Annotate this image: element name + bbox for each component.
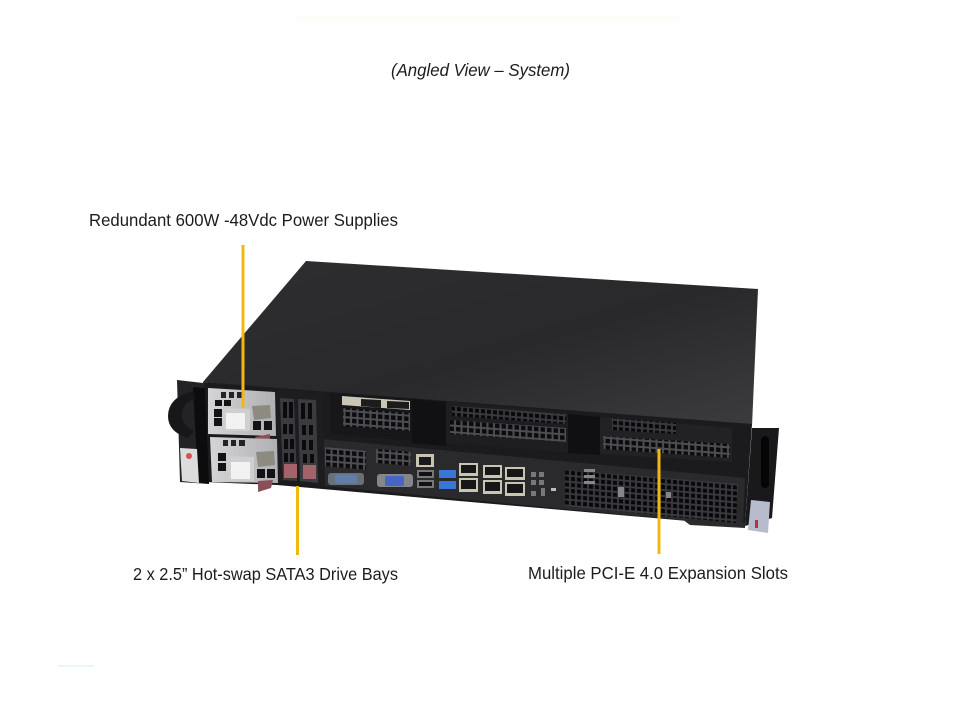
RJ45 management port bbox=[416, 454, 434, 467]
lower chassis lip bbox=[678, 516, 745, 528]
serial port bbox=[328, 473, 364, 485]
leader line: power supplies bbox=[242, 245, 244, 408]
I/O panel bbox=[322, 439, 745, 526]
right pillar bbox=[568, 414, 600, 455]
server lid bbox=[203, 261, 758, 426]
vent highlights bbox=[584, 469, 671, 498]
small connectors bbox=[531, 472, 556, 496]
server illustration bbox=[168, 261, 779, 533]
label: drive bays: 2 x 2.5” Hot-swap SATA3 Drive Bays bbox=[133, 564, 398, 584]
expansion bay: left bbox=[330, 393, 412, 441]
PSU handle tab bbox=[255, 434, 270, 446]
LAN port block bbox=[459, 463, 525, 496]
label: expansion slots: Multiple PCI-E 4.0 Expansion Slots bbox=[528, 563, 788, 583]
faint footer smudge bbox=[58, 665, 94, 667]
expansion bay: middle bbox=[446, 402, 568, 452]
power supply modules bbox=[208, 388, 278, 492]
faint header residue bbox=[295, 15, 680, 22]
left rack ear bbox=[168, 380, 209, 484]
drive bays bbox=[277, 389, 325, 486]
label: power supplies: Redundant 600W -48Vdc Power Supplies bbox=[89, 210, 398, 230]
vent grid: serial port side bbox=[325, 447, 366, 470]
PSU handle tab bbox=[258, 480, 273, 492]
USB 3 ports bbox=[439, 470, 456, 489]
leader line: drive bays bbox=[296, 486, 299, 555]
caption: angled view: (Angled View – System) bbox=[391, 60, 570, 80]
VGA port bbox=[377, 474, 413, 487]
expansion bay: right bbox=[600, 417, 732, 462]
USB ports bbox=[417, 470, 434, 488]
right rack ear bbox=[745, 428, 779, 533]
PSU upper bbox=[208, 388, 276, 446]
leader line: expansion slots bbox=[658, 449, 660, 554]
PSU lower bbox=[210, 437, 278, 492]
drive tray 2 bbox=[298, 399, 318, 483]
rear chassis body bbox=[203, 382, 752, 526]
center pillar bbox=[412, 399, 446, 446]
large vent grid bbox=[565, 470, 738, 523]
status grid bbox=[376, 449, 411, 466]
drive tray 1 bbox=[280, 398, 297, 481]
